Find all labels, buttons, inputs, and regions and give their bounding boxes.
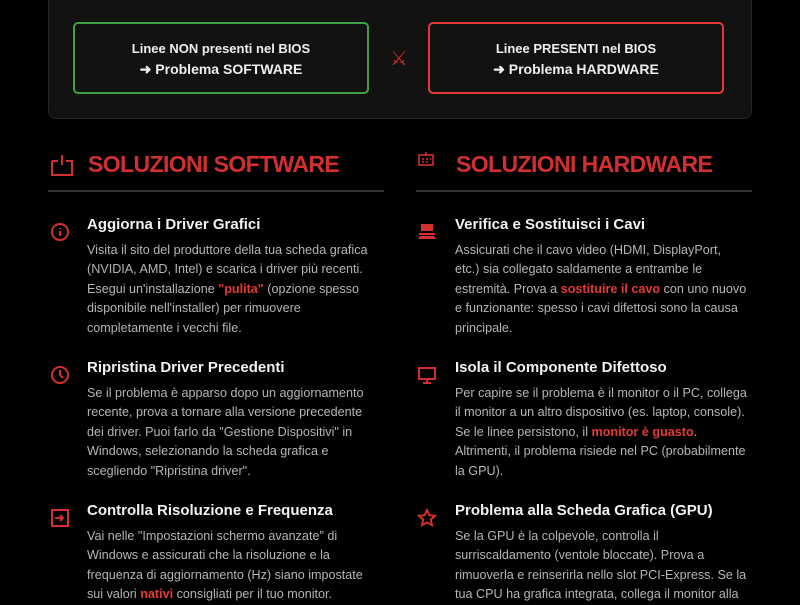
item: resolution <box>87 502 363 601</box>
box: hardware: ➜ Problema HARDWARE <box>493 61 659 77</box>
item: rollback: Se il problema è apparso dopo un aggiornamento <box>87 386 364 400</box>
item: gpu: rimuoverla e reinserirla nello slot PCI-Express. Se la <box>455 568 746 582</box>
item: rollback: scegliendo "Ripristina driver". <box>87 464 251 478</box>
icon: resolution <box>51 509 69 527</box>
heading: software: SOLUZIONI SOFTWARE <box>88 151 339 177</box>
item: driver update: Aggiorna i Driver Grafici <box>87 216 260 233</box>
item: gpu <box>455 502 746 601</box>
item: isolate <box>455 359 747 478</box>
item: rollback: dei driver. Puoi farlo da "Gestione Dispositivi" in <box>87 425 352 439</box>
item: isolate: Isola il Componente Difettoso <box>455 359 667 376</box>
item: resolution: Windows e assicurati che la risoluzione e la <box>87 548 330 562</box>
icon: crossed swords: ⚔ <box>390 48 408 70</box>
item: isolate: Se le linee persistono, il monitor è guasto. <box>455 425 697 439</box>
item: gpu: tua CPU ha grafica integrata, collega il monitor alla <box>455 587 739 601</box>
item: cables: principale. <box>455 321 512 335</box>
item: gpu: Se la GPU è la colpevole, controlla il <box>455 529 659 543</box>
icon: hardware <box>418 152 434 166</box>
item: driver update: disponibile nell'installer) per rimuovere <box>87 301 301 315</box>
box: hardware: Linee PRESENTI nel BIOS <box>496 41 656 56</box>
icon: clock <box>51 366 69 384</box>
item: isolate: Altrimenti, il problema risiede nel PC (probabilmente <box>455 444 745 458</box>
item: driver update: Esegui un'installazione "pulita" (opzione spesso <box>87 282 359 296</box>
item: driver update: completamente i vecchi file. <box>87 321 242 335</box>
item: cables: Verifica e Sostituisci i Cavi <box>455 216 645 233</box>
icon: info <box>51 223 69 241</box>
icon: software <box>51 155 73 176</box>
item: cables: e funzionante: spesso i cavi difettosi sono la causa <box>455 301 738 315</box>
item: rollback: Windows, selezionando la scheda grafica e <box>87 444 329 458</box>
icon: monitor <box>418 367 436 384</box>
item: isolate: Per capire se il problema è il monitor o il PC, collega <box>455 386 747 400</box>
panel: diagnosis <box>48 0 752 119</box>
item: rollback: Ripristina Driver Precedenti <box>87 359 285 376</box>
item: gpu: surriscaldamento (ventole bloccate). Prova a <box>455 548 704 562</box>
heading: hardware: SOLUZIONI HARDWARE <box>456 151 712 177</box>
icon: star <box>417 508 437 528</box>
item: gpu: Problema alla Scheda Grafica (GPU) <box>455 502 713 519</box>
box: software <box>73 22 369 94</box>
item: cables: Assicurati che il cavo video (HDMI, DisplayPort, <box>455 243 721 257</box>
box: hardware <box>428 22 724 94</box>
box: software: ➜ Problema SOFTWARE <box>140 61 302 77</box>
item: cables: etc.) sia collegato saldamente a entrambe le <box>455 262 702 276</box>
item: driver update <box>87 216 368 335</box>
item: cables <box>455 216 746 335</box>
item: driver update: (NVIDIA, AMD, Intel) e scarica i driver più recenti. <box>87 262 363 276</box>
item: resolution: Controlla Risoluzione e Frequenza <box>87 502 333 519</box>
item: rollback <box>87 359 364 478</box>
item: rollback: recente, prova a tornare alla versione precedente <box>87 405 362 419</box>
box: software: Linee NON presenti nel BIOS <box>132 41 310 56</box>
item: isolate: la GPU). <box>455 464 503 478</box>
icon: cable <box>418 224 436 239</box>
item: resolution: sui valori nativi consigliati per il tuo monitor. <box>87 587 332 601</box>
item: isolate: il monitor a un altro dispositivo (es. laptop, console). <box>455 405 745 419</box>
item: resolution: frequenza di aggiornamento (Hz) siano impostate <box>87 568 363 582</box>
item: cables: estremità. Prova a sostituire il cavo con uno nuovo <box>455 282 746 296</box>
item: driver update: Visita il sito del produttore della tua scheda grafica <box>87 243 368 257</box>
item: resolution: Vai nelle "Impostazioni schermo avanzate" di <box>87 529 337 543</box>
